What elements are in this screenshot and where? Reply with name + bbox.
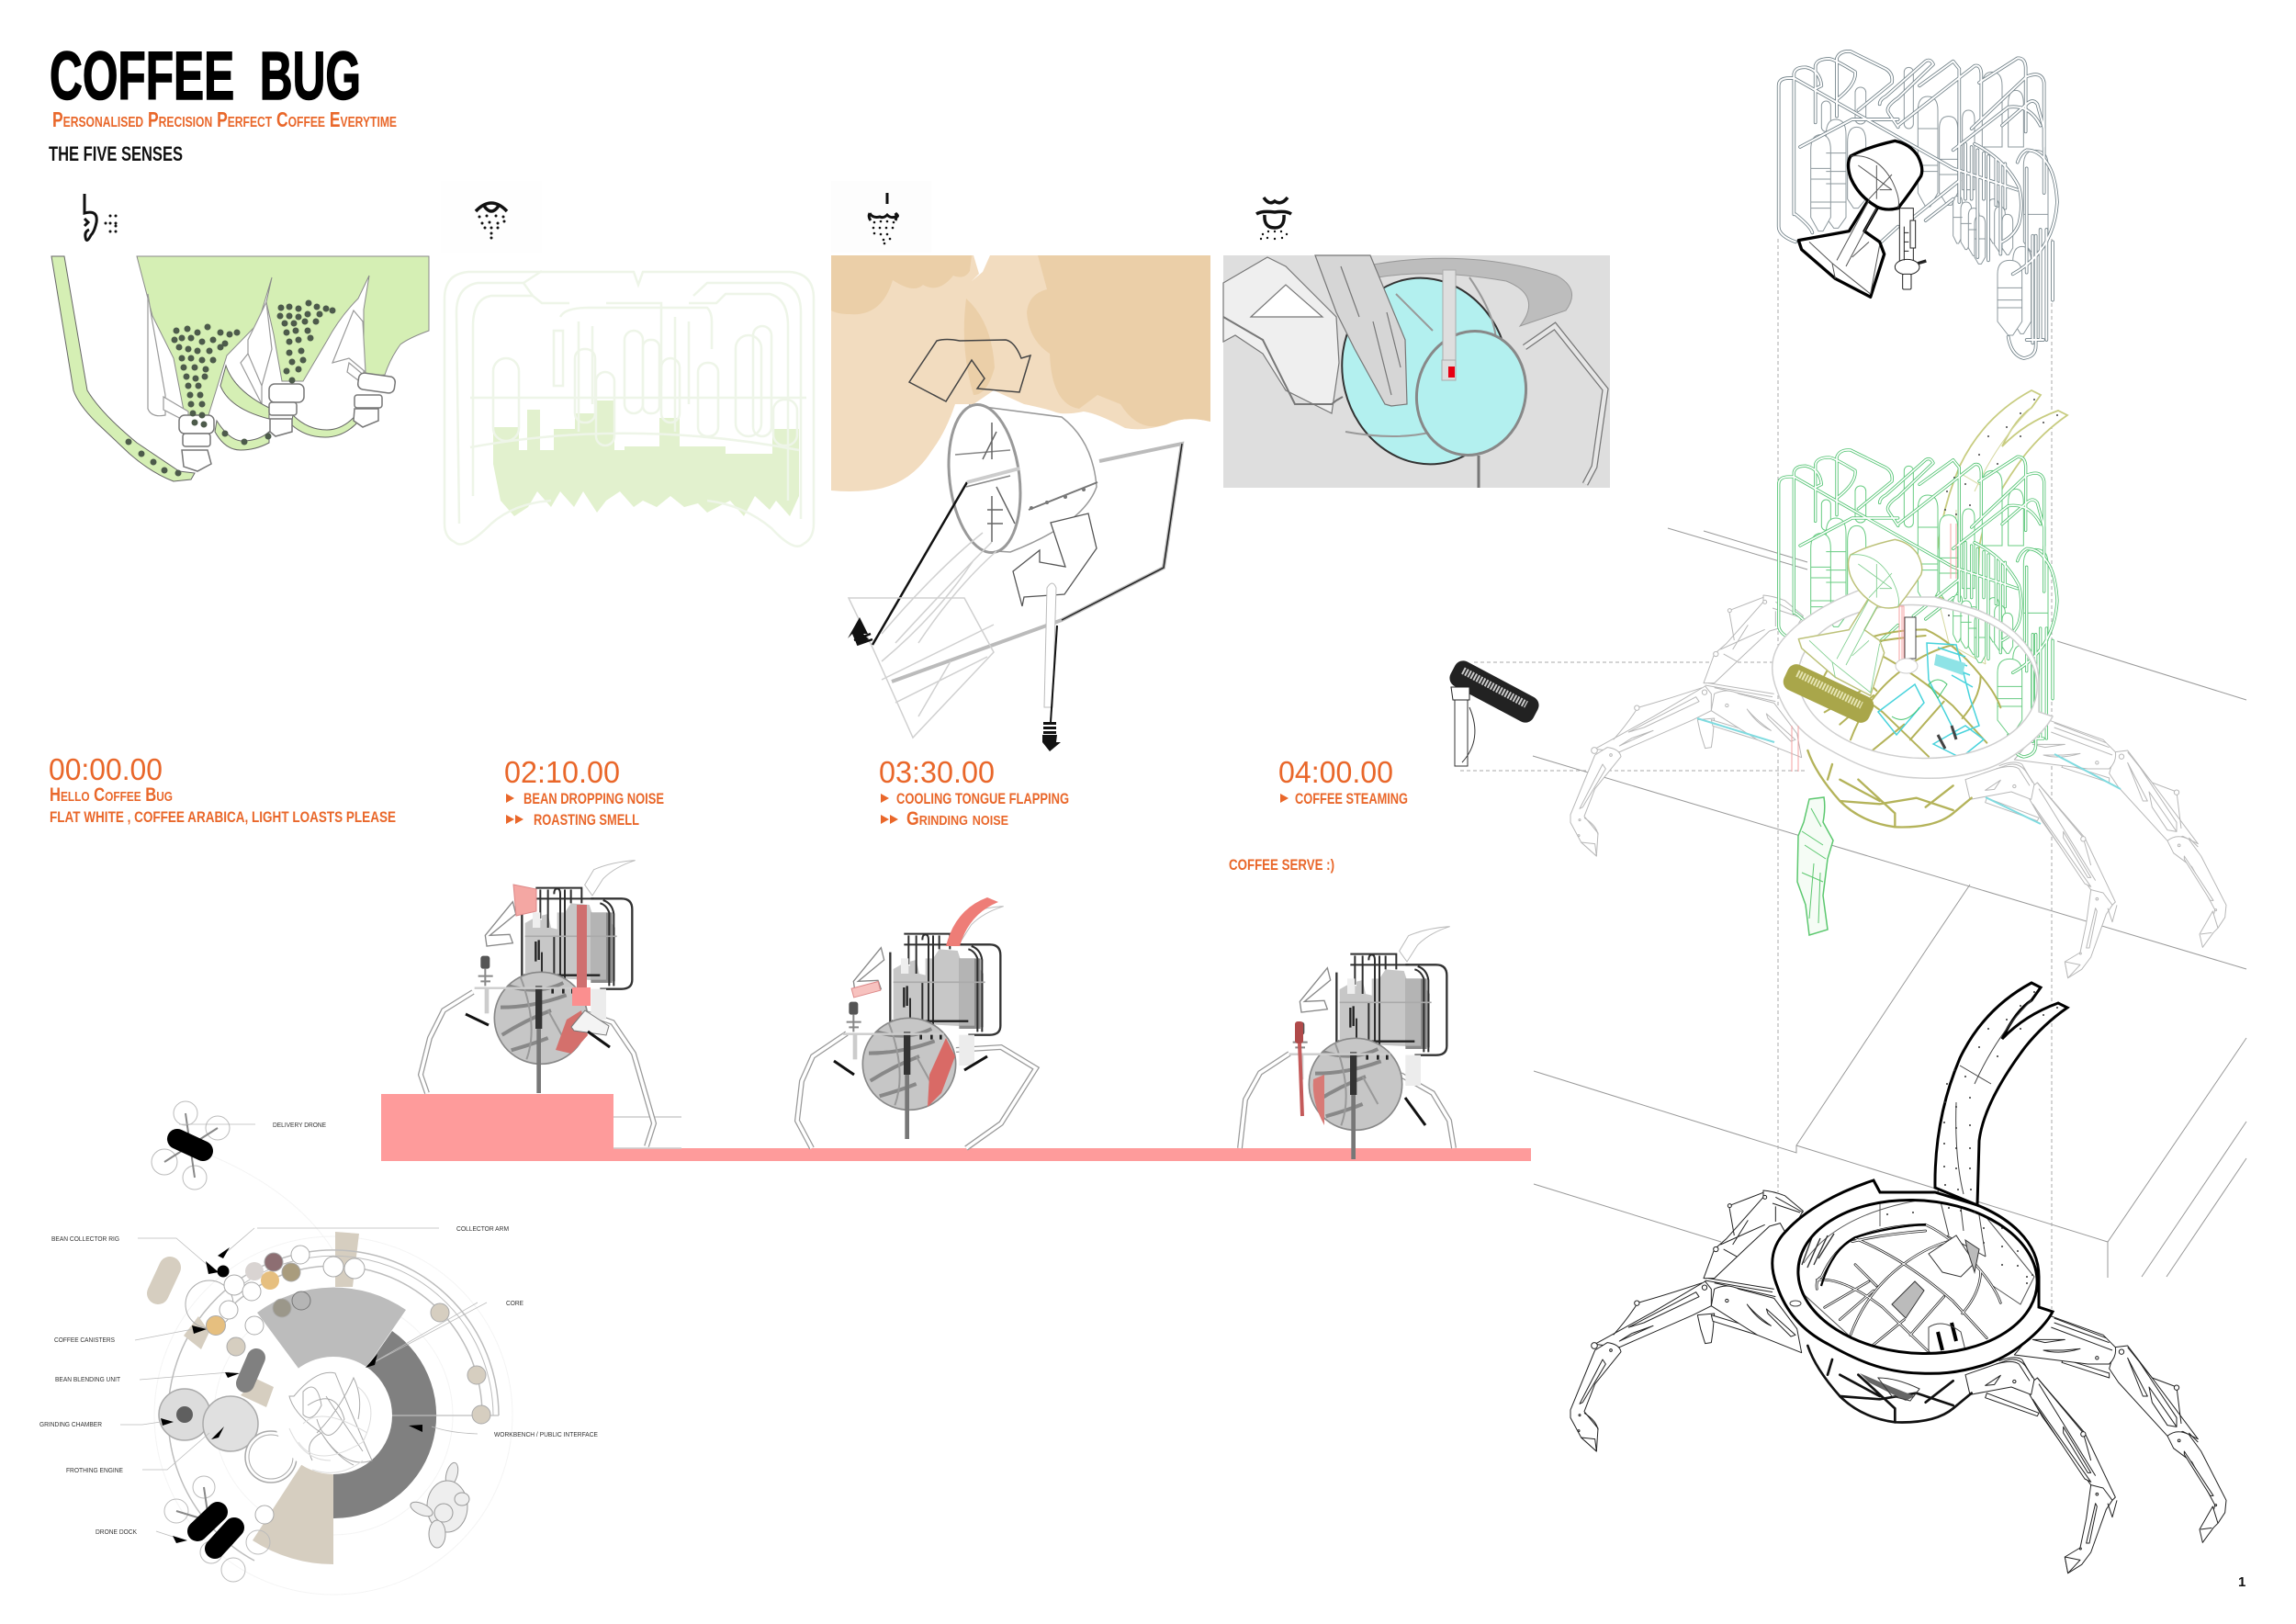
- pink ground: step and strip: [381, 1094, 1531, 1161]
- green hoppers: [137, 256, 429, 415]
- timeline step: 00:00: FLAT WHITE , COFFEE ARABICA, LIGHT LOASTS PLEASE: [50, 808, 396, 826]
- icon: eye: [441, 181, 542, 253]
- top ring band: [1373, 258, 1572, 326]
- timeline step: 02:10: BEAN DROPPING NOISE: [523, 790, 664, 807]
- connecting tubes: [215, 366, 359, 450]
- syringe: [1895, 209, 1926, 289]
- arrow: down: [1042, 722, 1061, 751]
- olive horns: [1935, 390, 2067, 664]
- cage: [1817, 1224, 2000, 1352]
- red accents: [1792, 524, 1956, 772]
- left arm pieces: [1223, 255, 1407, 413]
- olive cage: [1817, 629, 2000, 757]
- plan: labels: [39, 1121, 598, 1536]
- icon: nose: [831, 181, 931, 253]
- side elevation: robot 2: [797, 897, 1036, 1148]
- roasting drum: [940, 400, 1097, 557]
- plan: lower beige sector: [253, 1415, 333, 1564]
- plan: labels: DELIVERY DRONE: [273, 1121, 326, 1129]
- olive hull: [1807, 750, 1972, 827]
- plan: labels: WORKBENCH / PUBLIC INTERFACE: [494, 1430, 598, 1438]
- plan: workbench sector: [333, 1331, 436, 1518]
- olive hopper and drum: [1798, 539, 1922, 695]
- discharge tube: [1044, 583, 1056, 707]
- green tube: [51, 256, 195, 481]
- plan: labels: COLLECTOR ARM: [456, 1224, 509, 1233]
- plan: labels: GRINDING CHAMBER: [39, 1420, 102, 1428]
- valves: [179, 372, 396, 471]
- pale ring: [1773, 585, 2053, 778]
- timeline step: 00:00: Hello Coffee Bug: [50, 784, 173, 806]
- icon: mouth: [1256, 197, 1291, 239]
- plan: collector sector: [257, 1288, 406, 1415]
- bug horns: [1935, 983, 2067, 1205]
- coffee beans: [129, 303, 332, 473]
- rotating arrow: [909, 340, 1030, 401]
- canister structure: [148, 294, 366, 423]
- plan: rails: [168, 1250, 499, 1561]
- timeline step: 00:00: 00:00.00: [49, 752, 163, 786]
- pipework: [1779, 51, 2057, 358]
- plan: beige blocks: [184, 1316, 209, 1349]
- interior wall: [1804, 1199, 2034, 1341]
- steam tube and red gauge: [1443, 270, 1456, 362]
- small conveyor detail: [1446, 658, 1542, 766]
- title: COFFEE BUG: [50, 38, 361, 114]
- green canisters and pipework: [1779, 450, 2057, 757]
- bug ring: [1773, 1180, 2053, 1373]
- timeline step: 03:30: 03:30.00: [879, 755, 995, 789]
- frame: [872, 444, 1182, 682]
- green person: [1797, 797, 1833, 935]
- wall hatch: [1802, 1234, 1834, 1268]
- horn interior: [1938, 1000, 2032, 1257]
- plan: delivery drone: [152, 1101, 230, 1190]
- syringe column: [1899, 606, 1904, 671]
- plan: leader lines: [120, 1124, 487, 1539]
- exploded view: assembled green and pale bug: [1570, 390, 2226, 978]
- side elevation: robot 3: [1240, 927, 1454, 1159]
- timeline step: 04:00: COFFEE STEAMING: [1295, 790, 1408, 807]
- panel: taste: [1223, 197, 1610, 488]
- timeline step: 00:00: [49, 752, 396, 826]
- timeline step: 03:30: [879, 755, 1069, 829]
- canisters: [1811, 67, 2048, 335]
- exploded view: bottom black bug: [1570, 983, 2226, 1573]
- panel: smell: [831, 181, 1210, 751]
- peach aroma cloud: [831, 255, 1210, 491]
- plan diagram: [39, 1101, 598, 1595]
- plan: labels: BEAN BLENDING UNIT: [55, 1375, 120, 1383]
- pale legs: [1570, 595, 2226, 978]
- exploded axis dashed lines: [1460, 239, 2052, 1309]
- heading: the five senses: THE FIVE SENSES: [49, 142, 183, 165]
- interior mask: [1798, 605, 2037, 758]
- timeline step: 03:30: Grinding noise: [906, 808, 1008, 829]
- side elevation: robot 1: [421, 861, 654, 1146]
- timeline step: 02:10: [504, 755, 664, 829]
- plan: core: [275, 1357, 392, 1474]
- plan: labels: COFFEE CANISTERS: [54, 1336, 115, 1344]
- plan: labels: FROTHING ENGINE: [66, 1466, 123, 1474]
- hull: [1807, 1346, 1972, 1422]
- tray and chutes: [849, 533, 996, 738]
- plan: labels: CORE: [506, 1299, 523, 1307]
- cooling sphere: [1322, 260, 1528, 482]
- plan: labels: DRONE DOCK: [96, 1528, 137, 1536]
- exploded view: top pipe module: [1779, 51, 2057, 358]
- front disc: [1403, 320, 1539, 467]
- green fill levels: [493, 400, 799, 516]
- plan: guide circles: [154, 1139, 512, 1595]
- subtitle: Personalised Precision Perfect Coffee Everytime: [52, 107, 397, 131]
- cyan mechanisms: [1878, 643, 1984, 758]
- grey panel background: [1223, 255, 1610, 488]
- black outlined drum and hopper: [1798, 141, 1922, 297]
- plan: beige pill: [158, 1268, 170, 1293]
- timeline step: 03:30: COOLING TONGUE FLAPPING: [896, 790, 1069, 807]
- right leg: [1525, 326, 1605, 484]
- plan: labels: BEAN COLLECTOR RIG: [51, 1235, 119, 1243]
- black legs: [1570, 1190, 1803, 1451]
- panel: sight: [441, 181, 814, 547]
- return arrow: [1013, 513, 1097, 606]
- plan: drone dock: [164, 1476, 270, 1582]
- arrow: up: [848, 617, 869, 645]
- plan: arrowheads: [161, 1247, 422, 1543]
- plan: beige bar: [335, 1232, 359, 1287]
- page number: 1: [2238, 1574, 2245, 1590]
- ground plane lines: [1533, 528, 2246, 1278]
- plan: grinding chamber and frother: [159, 1389, 297, 1483]
- panel: hearing: [51, 194, 429, 481]
- coffee serve note: COFFEE SERVE :): [1229, 856, 1334, 874]
- pale pipework: [445, 271, 814, 547]
- timeline step: 04:00: 04:00.00: [1278, 755, 1393, 789]
- plan: person: [409, 1461, 469, 1548]
- plan: canisters: [186, 1246, 490, 1524]
- icon: ear: [84, 194, 116, 241]
- timeline step: 02:10: 02:10.00: [504, 755, 620, 789]
- interior mask: [1794, 1192, 2042, 1361]
- timeline step: 02:10: ROASTING SMELL: [534, 811, 639, 829]
- cage machinery: [1892, 1235, 1979, 1355]
- olive conveyor: [1780, 661, 1877, 726]
- plan: blending unit: [245, 1358, 256, 1383]
- timeline step: 04:00: [1278, 755, 1408, 807]
